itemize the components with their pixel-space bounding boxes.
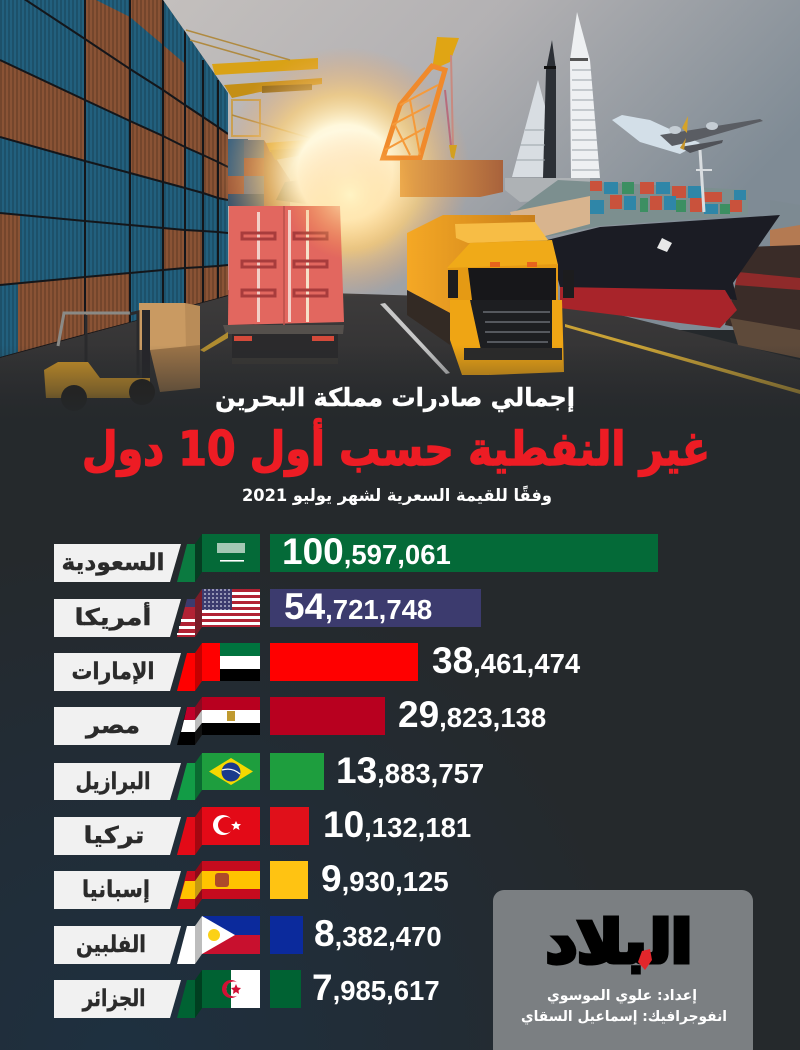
photo bottom fade [0,345,800,423]
row: Spain [54,858,449,909]
country label [54,817,181,855]
heading: subtitle: وفقًا للقيمة السعرية لشهر يوليو 2021 [242,484,552,506]
towers: Bahrain World Trade Center [505,12,600,202]
value: 29,823,138 [398,694,546,735]
road [0,290,800,420]
bar [270,916,303,954]
country label: مصر [85,713,140,739]
bar [270,861,308,899]
row: Algeria [54,967,440,1018]
country label [54,926,181,964]
bar [270,807,309,845]
country label: الإمارات [72,659,154,685]
yellow truck [407,215,574,375]
row: Brazil [54,750,484,800]
airplane [612,115,763,154]
yellow tower crane [383,37,459,159]
credits panel [493,890,753,1050]
flag: Turkey [177,807,260,855]
value: 54,721,748 [284,586,432,627]
value: 9,930,125 [321,858,449,899]
flag: Egypt [177,697,260,745]
value: 10,132,181 [323,804,471,845]
bar [270,697,385,735]
country label: السعودية [62,550,164,576]
bar [270,970,301,1008]
bar [270,589,481,627]
country label [54,763,181,800]
flag: Brazil [177,753,260,800]
sun glare [220,47,470,297]
row: Philippines [54,913,442,964]
bar [270,534,658,572]
hanging container [400,160,503,197]
flag: USA [177,589,260,637]
bar [270,643,418,681]
heading: line one: إجمالي صادرات مملكة البحرين [215,383,575,413]
country label [54,707,181,745]
boxes [139,303,200,392]
cargo ship [510,150,780,328]
stacked containers behind truck [228,139,290,206]
country label: الفلبين [76,932,146,958]
red truck [223,206,344,364]
value: 13,883,757 [336,750,484,791]
credit: prepared by: إعداد: علوي الموسوي [547,988,697,1005]
soft glow on truck [285,130,415,260]
row: USA [54,586,481,637]
row: Egypt [54,694,546,745]
country label [54,980,181,1018]
flag: UAE [177,643,260,691]
value: 7,985,617 [312,967,440,1008]
flag: Saudi Arabia [177,534,260,582]
country label [54,544,181,582]
country label: الجزائر [82,986,146,1012]
value: 38,461,474 [432,640,581,681]
logo: Al Bilad: البلاد [546,908,692,976]
hero photo illustration: port and cargo [0,0,800,423]
value: 100,597,061 [282,531,451,572]
row: Turkey [54,804,471,855]
forklift [44,310,155,411]
country label: أمريكا [74,601,152,631]
flag: Spain [177,861,260,909]
bar [270,753,324,790]
country label [54,653,181,691]
road markings [200,303,800,394]
country label: إسبانيا [82,877,150,903]
second ship at right [725,200,800,358]
country label [54,871,181,909]
row: Saudi Arabia [54,531,658,582]
heading: main red title: غير النفطية حسب أول 10 دول [82,418,710,477]
credit: infographic by: انفوجرافيك: إسماعيل السقاي [521,1009,727,1026]
flag: Philippines [177,916,260,964]
container wall [0,0,228,360]
flag: Algeria [177,970,260,1018]
country label [54,599,181,637]
country label: تركيا [84,823,144,849]
value: 8,382,470 [314,913,442,954]
row: UAE [54,640,581,691]
left harbour crane [186,30,345,204]
background bluish corner glow [0,500,800,1050]
sky [0,0,800,330]
country label: البرازيل [76,769,150,795]
